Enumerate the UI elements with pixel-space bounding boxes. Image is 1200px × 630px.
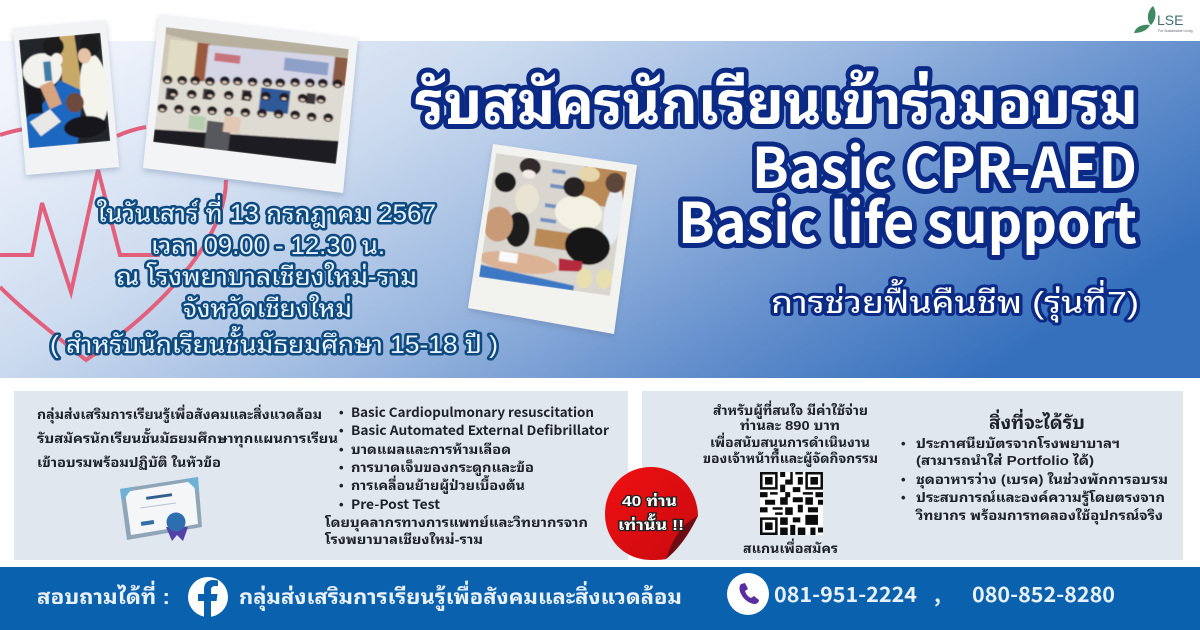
badge: 40 seats only: เท่านั้น !!: [618, 512, 684, 534]
photo: students practising on manikin: [468, 144, 637, 334]
scan caption: สแกนเพื่อสมัคร: [743, 538, 838, 556]
logo: LSE: [1134, 6, 1193, 33]
logo: LSE: LSE: [1157, 12, 1183, 28]
topic list: •: [339, 442, 344, 457]
QR code: [760, 472, 823, 535]
topic list: Basic Automated External Defibrillator: [351, 420, 609, 439]
heartbeat and heart line graphic: [0, 127, 226, 360]
topic list: •: [339, 405, 344, 420]
topic list: •: [339, 423, 344, 438]
event details text: ในวันเสาร์ ที่ 13 กรกฎาคม 2567: [97, 195, 436, 228]
event details text: ณ โรงพยาบาลเชียงใหม่-ราม: [116, 262, 417, 291]
benefits list: •: [901, 490, 906, 505]
topic list: บาดแผลและการห้ามเลือด: [351, 441, 511, 457]
photo: group of students: [143, 14, 358, 193]
topic list: [324, 402, 609, 547]
intro text: เข้าอบรมพร้อมปฏิบัติ ในหัวข้อ: [37, 454, 221, 470]
benefits heading: สิ่งที่จะได้รับ: [989, 408, 1085, 433]
logo: LSE: For Sustainable Living: [1158, 29, 1193, 33]
topic list: การเคลื่อนย้ายผู้ป่วยเบื้องต้น: [351, 475, 525, 495]
benefits list: ประสบการณ์และองค์ความรู้โดยตรงจาก: [916, 488, 1165, 507]
topic list: •: [339, 497, 344, 512]
phone numbers: [774, 579, 1115, 609]
footer contact bar: [0, 567, 1200, 630]
event details text: ( สำหรับนักเรียนชั้นมัธยมศึกษา 15-18 ปี ): [50, 325, 498, 359]
badge: 40 seats only: 40 ท่าน: [622, 492, 677, 510]
panel: fee and benefits: [642, 391, 1183, 560]
event details text: เวลา 09.00 - 12.30 น.: [151, 232, 385, 260]
topic list: •: [339, 478, 344, 493]
photo: CPR practice on mat: [13, 20, 119, 175]
fee text: [703, 400, 878, 468]
benefits list: วิทยากร พร้อมการทดลองใช้อุปกรณ์จริง: [914, 506, 1163, 525]
title: Basic life support: Basic life support: [678, 179, 1137, 260]
topic list: •: [339, 460, 344, 475]
benefits list: (สามารถนำใส่ Portfolio ได้): [916, 452, 1094, 468]
benefits list: ชุดอาหารว่าง (เบรค) ในช่วงพักการอบรม: [916, 471, 1168, 489]
fee text: สำหรับผู้ที่สนใจ มีค่าใช้จ่าย: [713, 400, 868, 420]
event details text: จังหวัดเชียงใหม่: [183, 294, 352, 323]
title: Thai headline: รับสมัครนักเรียนเข้าร่วมอบรม: [415, 68, 1138, 137]
fee text: เพื่อสนับสนุนการดำเนินงาน: [710, 432, 870, 452]
topic list: โรงพยาบาลเชียงใหม่-ราม: [324, 531, 483, 547]
benefits list: •: [901, 436, 906, 451]
badge: 40 seats only: [605, 467, 698, 560]
intro text: กลุ่มส่งเสริมการเรียนรู้เพื่อสังคมและสิ่งแวดล้อม: [37, 404, 322, 424]
icon: facebook: [188, 577, 228, 617]
facebook group name: กลุ่มส่งเสริมการเรียนรู้เพื่อสังคมและสิ่งแวดล้อม: [239, 580, 682, 611]
icon: certificate: [120, 477, 202, 541]
benefits list: •: [901, 472, 906, 487]
topic list: โดยบุคลากรทางการแพทย์และวิทยากรจาก: [324, 513, 588, 532]
intro text: รับสมัครนักเรียนชั้นมัธยมศึกษาทุกแผนการเรียน: [37, 428, 338, 448]
phone numbers: ,: [934, 579, 941, 609]
phone numbers: 081-951-2224: [774, 579, 917, 609]
phone numbers: 080-852-8280: [972, 579, 1115, 609]
panel: course topics: [14, 391, 628, 560]
fee text: ท่านละ 890 บาท: [740, 417, 840, 433]
event details text: [50, 195, 498, 359]
contact label: สอบถามได้ที่ :: [37, 580, 170, 609]
hero banner background: [0, 41, 1200, 378]
subtitle: CPR cohort 7: การช่วยฟื้นคืนชีพ (รุ่นที่7): [771, 278, 1139, 323]
benefits list: ประกาศนียบัตรจากโรงพยาบาลฯ: [916, 435, 1120, 451]
title: Basic CPR-AED: Basic CPR-AED: [752, 124, 1137, 205]
fee text: ของเจ้าหน้าที่และผู้จัดกิจกรรม: [703, 448, 878, 468]
icon: phone: [727, 573, 769, 615]
topic list: การบาดเจ็บของกระดูกและข้อ: [351, 458, 534, 477]
benefits list: [901, 435, 1168, 525]
topic list: Pre-Post Test: [351, 494, 441, 513]
topic list: Basic Cardiopulmonary resuscitation: [351, 402, 594, 421]
intro text: [37, 404, 338, 470]
